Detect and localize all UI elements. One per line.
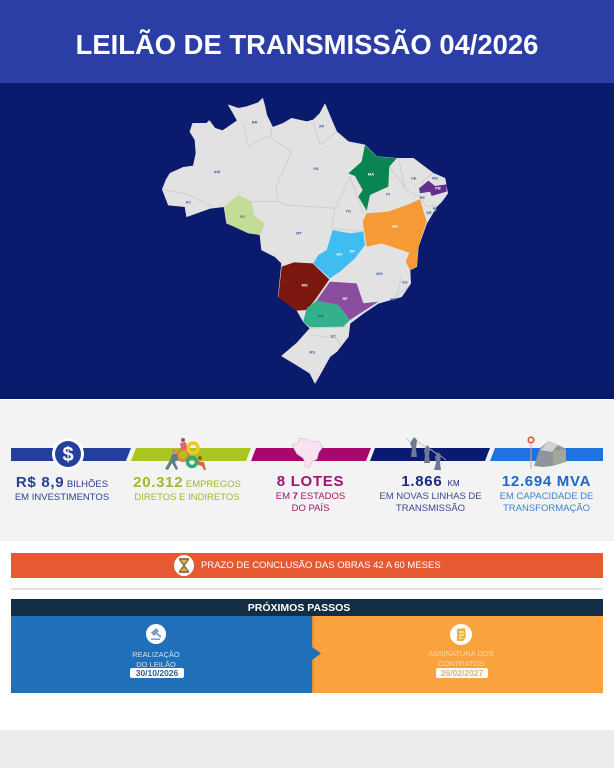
- signing step text: ASSINATURA DOS: [428, 649, 494, 658]
- state labels: CE: [411, 175, 417, 180]
- stat bars: [11, 436, 603, 470]
- state labels: ES: [402, 279, 408, 284]
- state: Maranhão: [348, 145, 397, 211]
- auction step text: [132, 650, 180, 668]
- state labels: RR: [252, 119, 258, 124]
- map of Brazil: DF: [350, 249, 356, 254]
- stat: jobs: DIRETOS E INDIRETOS: [134, 492, 240, 503]
- stat: jobs: 20.312 EMPREGOS: [133, 474, 241, 491]
- state: Paraíba: [419, 181, 447, 196]
- panel: auction step: [11, 616, 312, 693]
- stat: lines: TRANSMISSÃO: [396, 503, 465, 514]
- state labels: PI: [386, 191, 390, 196]
- bar: jobs: [131, 448, 251, 461]
- stat: lines: [379, 473, 482, 514]
- stat: investments: [15, 474, 109, 503]
- state: Bahia: [363, 199, 427, 270]
- icon: contract: [450, 624, 472, 645]
- icon: people and gears: [165, 438, 206, 470]
- stat: capacity: 12.694 MVA: [502, 473, 591, 490]
- state labels: SE: [426, 210, 432, 215]
- map of Brazil: GO: [336, 251, 342, 256]
- state labels: AL: [433, 205, 439, 210]
- bar: lots: [251, 448, 371, 461]
- icon: transmission towers: [406, 437, 446, 470]
- auction step text: DO LEILÃO: [136, 660, 176, 668]
- stat: investments: R$ 8,9 BILHÕES: [16, 474, 108, 491]
- state labels: MG: [376, 271, 383, 276]
- state labels: AP: [319, 123, 325, 128]
- state labels: PE: [420, 195, 425, 200]
- state: Rondônia: [224, 195, 265, 235]
- state labels: RS: [310, 349, 315, 354]
- panel: signing step: [312, 616, 603, 693]
- stat: lots: 8 LOTES: [277, 473, 344, 490]
- stat: capacity: TRANSFORMAÇÃO: [503, 503, 590, 514]
- map of Brazil: PB: [435, 186, 441, 191]
- stats panel background: [0, 400, 614, 541]
- icon: dollar: $: [62, 444, 74, 466]
- state labels: PA: [313, 166, 319, 171]
- state labels: TO: [346, 208, 351, 213]
- map panel background: [0, 83, 614, 399]
- arrow between steps: [312, 647, 321, 660]
- signing step text: CONTRATOS: [438, 658, 484, 668]
- divider line: [11, 588, 603, 590]
- map of Brazil: [162, 98, 448, 384]
- icon: hourglass: [174, 555, 194, 576]
- bar: investments: [11, 448, 131, 461]
- map of Brazil: BA: [392, 223, 398, 228]
- state labels: RO: [240, 214, 246, 219]
- map of Brazil: MA: [368, 171, 374, 176]
- icon: gavel: [146, 624, 166, 644]
- stat: jobs: [133, 474, 241, 503]
- next steps heading text: PRÓXIMOS PASSOS: [248, 602, 350, 614]
- state labels: AM: [214, 169, 221, 174]
- stat: capacity: [500, 473, 593, 514]
- state labels: SC: [331, 333, 336, 338]
- state labels: MT: [296, 230, 302, 235]
- deadline text: PRAZO DE CONCLUSÃO DAS OBRAS 42 A 60 MESES: [201, 560, 441, 571]
- icon: substation: [528, 437, 566, 469]
- auction date: 30/10/2026: [136, 668, 178, 678]
- signing date: 26/02/2027: [441, 668, 483, 678]
- state: Goiás: [313, 230, 365, 278]
- state: Paraná: [303, 301, 350, 327]
- state borders: [162, 122, 437, 347]
- icon: mini map outline: [292, 438, 323, 468]
- header banner: [0, 0, 614, 83]
- icon: dollar: [52, 438, 84, 470]
- stat: investments: EM INVESTIMENTOS: [15, 492, 109, 503]
- state labels: [185, 119, 439, 354]
- stat: lots: [276, 473, 345, 514]
- next steps heading: [11, 599, 603, 616]
- deadline banner: [11, 553, 603, 578]
- state labels: AC: [185, 200, 191, 205]
- state labels: RN: [432, 176, 438, 181]
- stat: capacity: EM CAPACIDADE DE: [500, 490, 593, 502]
- map of Brazil: SP: [342, 296, 348, 301]
- bar: capacity: [490, 448, 603, 461]
- state labels: PR: [318, 313, 324, 318]
- bar: lines: [370, 448, 490, 461]
- title: LEILÃO DE TRANSMISSÃO 04/2026: [76, 29, 538, 60]
- stat: lots: EM 7 ESTADOS: [276, 490, 345, 502]
- state: Mato Grosso do Sul: [278, 262, 329, 311]
- footer band: [0, 730, 614, 768]
- national territory: [162, 98, 448, 383]
- auction step text: REALIZAÇÃO: [132, 650, 180, 659]
- state labels: RJ: [390, 296, 396, 301]
- stat: lines: 1.866 KM: [401, 473, 460, 490]
- stat: lots: DO PAÍS: [292, 503, 329, 514]
- signing step text: [428, 649, 494, 668]
- map of Brazil: MS: [302, 282, 308, 287]
- stat: lines: EM NOVAS LINHAS DE: [379, 490, 482, 502]
- state: São Paulo: [317, 282, 378, 320]
